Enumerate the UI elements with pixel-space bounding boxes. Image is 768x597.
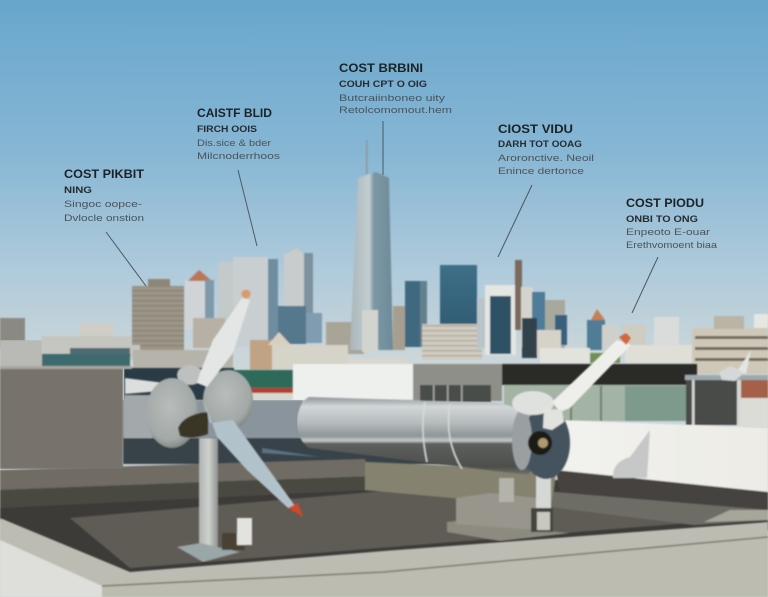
hub interior xyxy=(178,412,208,438)
callout 2: caistf blid: Milcnoderrhoos xyxy=(197,151,280,162)
callout 2: caistf blid xyxy=(197,106,280,246)
callout 5: cost piodu: Erethvomoent biaa xyxy=(626,240,718,251)
silver cylinder turbine xyxy=(297,333,631,541)
rear sphere xyxy=(177,365,203,385)
callout 5: cost piodu: ONBI TO ONG xyxy=(626,214,698,225)
callout 4: ciost vidu xyxy=(498,122,594,257)
foreground ledge xyxy=(0,518,768,597)
callout 4: ciost vidu: DARH TOT OOAG xyxy=(498,139,582,150)
junction box xyxy=(222,533,245,550)
left propeller turbine xyxy=(124,290,320,562)
left white wall xyxy=(0,540,102,597)
ledge top xyxy=(0,518,768,586)
second turbine mount xyxy=(536,475,551,511)
cylinder seams xyxy=(423,402,462,469)
callout 5: cost piodu: Enpeoto E-ouar xyxy=(626,227,710,238)
lower blade xyxy=(204,400,298,510)
callout 5: cost piodu: COST PIODU xyxy=(626,196,704,210)
callout 3: cost brbini: COUH CPT O OIG xyxy=(339,79,427,90)
white blade xyxy=(552,340,631,412)
callout 3: cost brbini: COST BRBINI xyxy=(339,61,423,75)
base plate xyxy=(177,543,240,562)
background blades xyxy=(125,378,173,394)
callout 2: caistf blid: CAISTF BLID xyxy=(197,106,272,120)
ledge front wall xyxy=(102,537,768,597)
callout 4: ciost vidu: Aroronctive. Neoil xyxy=(498,153,594,164)
callout 5: cost piodu xyxy=(626,196,718,313)
callout 1: cost pikbit: COST PIKBIT xyxy=(64,167,145,181)
hub xyxy=(543,408,564,430)
callout 4: ciost vidu: Enince dertonce xyxy=(498,166,584,177)
concrete plinth xyxy=(447,521,570,541)
left grey rooftop block xyxy=(0,340,132,469)
mast xyxy=(199,438,218,550)
callout 3: cost brbini: Butcraiinboneo uity xyxy=(339,93,445,104)
mid-ground rooftop buildings xyxy=(124,350,768,427)
callout 1: cost pikbit: NING xyxy=(64,185,92,196)
rooftop surfaces and parapets xyxy=(0,400,768,575)
callout 3: cost brbini: Retolcomomout.hem xyxy=(339,105,452,116)
callout 4: ciost vidu: CIOST VIDU xyxy=(498,122,573,136)
upper blade xyxy=(197,298,250,387)
cylinder body xyxy=(297,397,538,475)
callout 2: caistf blid: FIRCH OOIS xyxy=(197,124,257,135)
left sphere xyxy=(146,378,198,448)
right sphere xyxy=(203,370,253,430)
callout 1: cost pikbit xyxy=(64,167,146,286)
callout 3: cost brbini xyxy=(339,61,452,175)
skyline buildings xyxy=(0,140,768,374)
callout 1: cost pikbit: Dvlocle onstion xyxy=(64,213,144,224)
orange tip xyxy=(288,503,303,517)
callout 2: caistf blid: Dis.sice & bder xyxy=(197,138,271,149)
duct behind xyxy=(124,395,152,438)
nose dome xyxy=(512,391,554,415)
callout 1: cost pikbit: Singoc oopce- xyxy=(64,199,142,210)
ledge shadow line xyxy=(102,537,768,586)
rear disc and generator xyxy=(522,407,570,479)
